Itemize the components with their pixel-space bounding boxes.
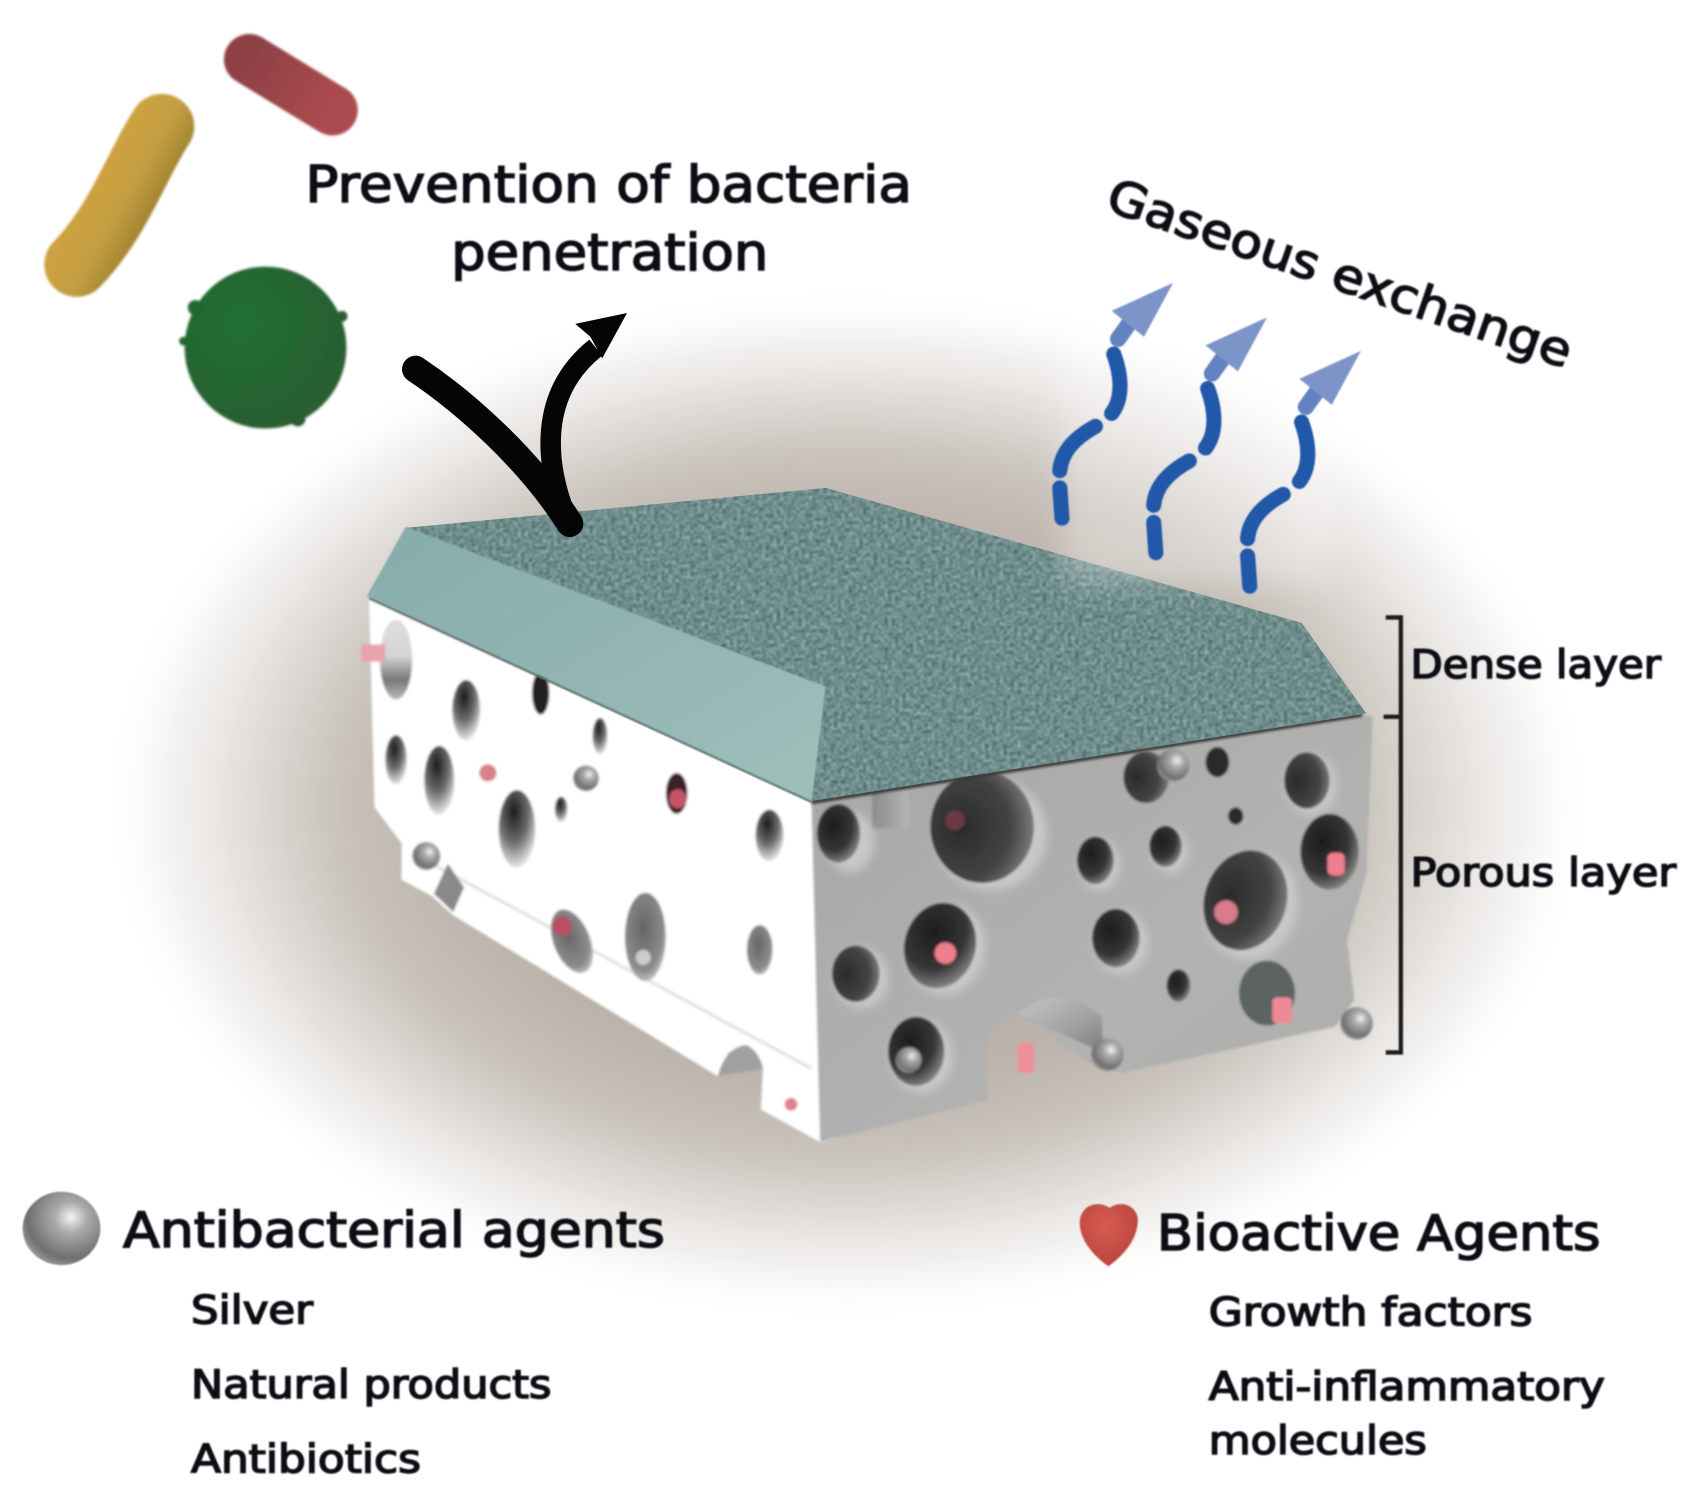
panel: porous layer grey side — [812, 715, 1373, 1142]
legend: antibacterial agents — [23, 1192, 665, 1482]
arrow 1 — [1060, 283, 1173, 518]
pores on grey side — [817, 747, 1359, 1086]
legend heading: Antibacterial agents — [123, 1203, 665, 1259]
legend heading: Bioactive Agents — [1157, 1206, 1601, 1262]
arrows: gaseous exchange — [1060, 283, 1361, 586]
arrow 3 — [1248, 351, 1361, 586]
agents on grey side — [896, 749, 1373, 1073]
legend items: Silver — [191, 1288, 313, 1333]
panel: porous layer white side — [362, 600, 839, 1142]
icon: red rod bacterium — [249, 59, 332, 110]
legend: bioactive agents — [1080, 1204, 1605, 1464]
legend items: Natural products — [191, 1363, 551, 1408]
legend items — [1209, 1291, 1605, 1464]
heading: prevention of bacteria penetration — [305, 155, 912, 282]
bracket: dense and porous layers — [1384, 617, 1401, 1052]
legend items: Antibiotics — [191, 1437, 421, 1482]
panel: dense layer — [367, 488, 1366, 802]
legend items: Anti-inflammatory — [1209, 1365, 1605, 1410]
highlights around pores — [827, 755, 1337, 1092]
legend items — [191, 1288, 551, 1482]
arrow 2 — [1154, 317, 1267, 553]
agents on white side — [362, 644, 798, 1111]
icon: red heart-shaped agent — [1080, 1204, 1138, 1266]
icon: green round bacterium — [179, 267, 348, 429]
icon: yellow rod bacterium — [77, 126, 162, 264]
label: porous layer: Porous layer — [1411, 851, 1676, 896]
dense layer textured top — [406, 488, 1366, 801]
label: dense layer: Dense layer — [1411, 643, 1661, 688]
background: pale halo behind gas arrows — [1063, 313, 1333, 583]
heading: gaseous exchange: Gaseous exchange — [1100, 169, 1579, 380]
heading: prevention of bacteria penetration: penetration — [451, 223, 768, 282]
icon: silver sphere — [23, 1192, 100, 1265]
legend items: Growth factors — [1209, 1291, 1533, 1336]
icon: bacteria group — [77, 59, 348, 429]
arrow: bacteria deflected by the dense layer — [416, 313, 627, 524]
dense layer front bevel — [367, 527, 826, 802]
pores on white side — [380, 620, 784, 981]
membrane block — [362, 488, 1373, 1142]
heading: prevention of bacteria penetration: Prevention of bacteria — [305, 155, 912, 214]
background: soft brown-grey glow — [122, 305, 1572, 1303]
legend items: molecules — [1209, 1419, 1427, 1464]
